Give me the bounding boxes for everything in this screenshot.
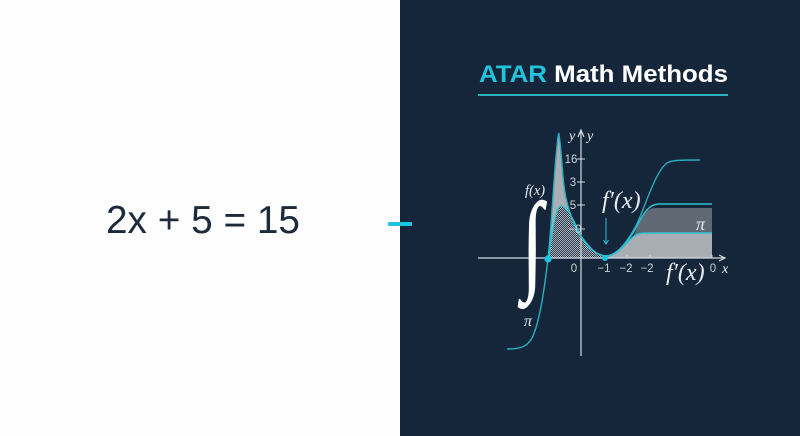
axis variable labels: y	[567, 129, 576, 144]
label: f'(x) upper: f′(x)	[602, 188, 641, 214]
chart: function graph	[478, 129, 729, 356]
x axis	[478, 255, 725, 261]
tick labels: 16	[565, 154, 577, 166]
tick labels: 3	[570, 177, 576, 189]
axis variable labels: x	[721, 262, 729, 277]
axis tick marks	[577, 159, 712, 258]
label: f(x): f(x)	[525, 183, 545, 199]
y axis	[578, 130, 584, 356]
points on x axis	[544, 255, 608, 263]
area: dithered hump	[549, 206, 605, 258]
curve: lower plateau	[605, 233, 712, 257]
title: ATAR Math Methods: ATAR Math Methods	[479, 61, 728, 88]
axis variable labels: y	[585, 129, 594, 144]
integral sign: ∫	[518, 182, 547, 309]
equation text: 2x + 5 = 15	[106, 199, 300, 242]
tick labels: −2	[640, 263, 654, 275]
panel: right navy background	[400, 0, 800, 436]
tick labels	[565, 154, 716, 275]
area: dark gray band	[633, 208, 712, 237]
tick labels: −2	[619, 263, 633, 275]
curve: inner hump	[549, 204, 712, 256]
area: light gray peak	[549, 133, 605, 258]
arrow to minimum	[604, 218, 608, 244]
tick labels: 0	[710, 263, 716, 275]
area: light gray plateau	[605, 233, 712, 258]
tick labels: −1	[597, 263, 611, 275]
tick labels: 5	[570, 200, 576, 212]
panel: left white background	[0, 0, 400, 436]
tick labels: 0	[571, 263, 577, 275]
title underline	[478, 94, 728, 96]
axis variable labels	[567, 129, 729, 277]
curve: long cyan curve with peak	[507, 133, 700, 349]
cyan dash connector	[388, 222, 412, 226]
label: pi lower left: π	[524, 313, 533, 330]
tick labels: −0	[568, 224, 582, 236]
label: f'(x) lower: f′(x)	[666, 260, 705, 286]
label: pi in band: π	[696, 214, 706, 234]
